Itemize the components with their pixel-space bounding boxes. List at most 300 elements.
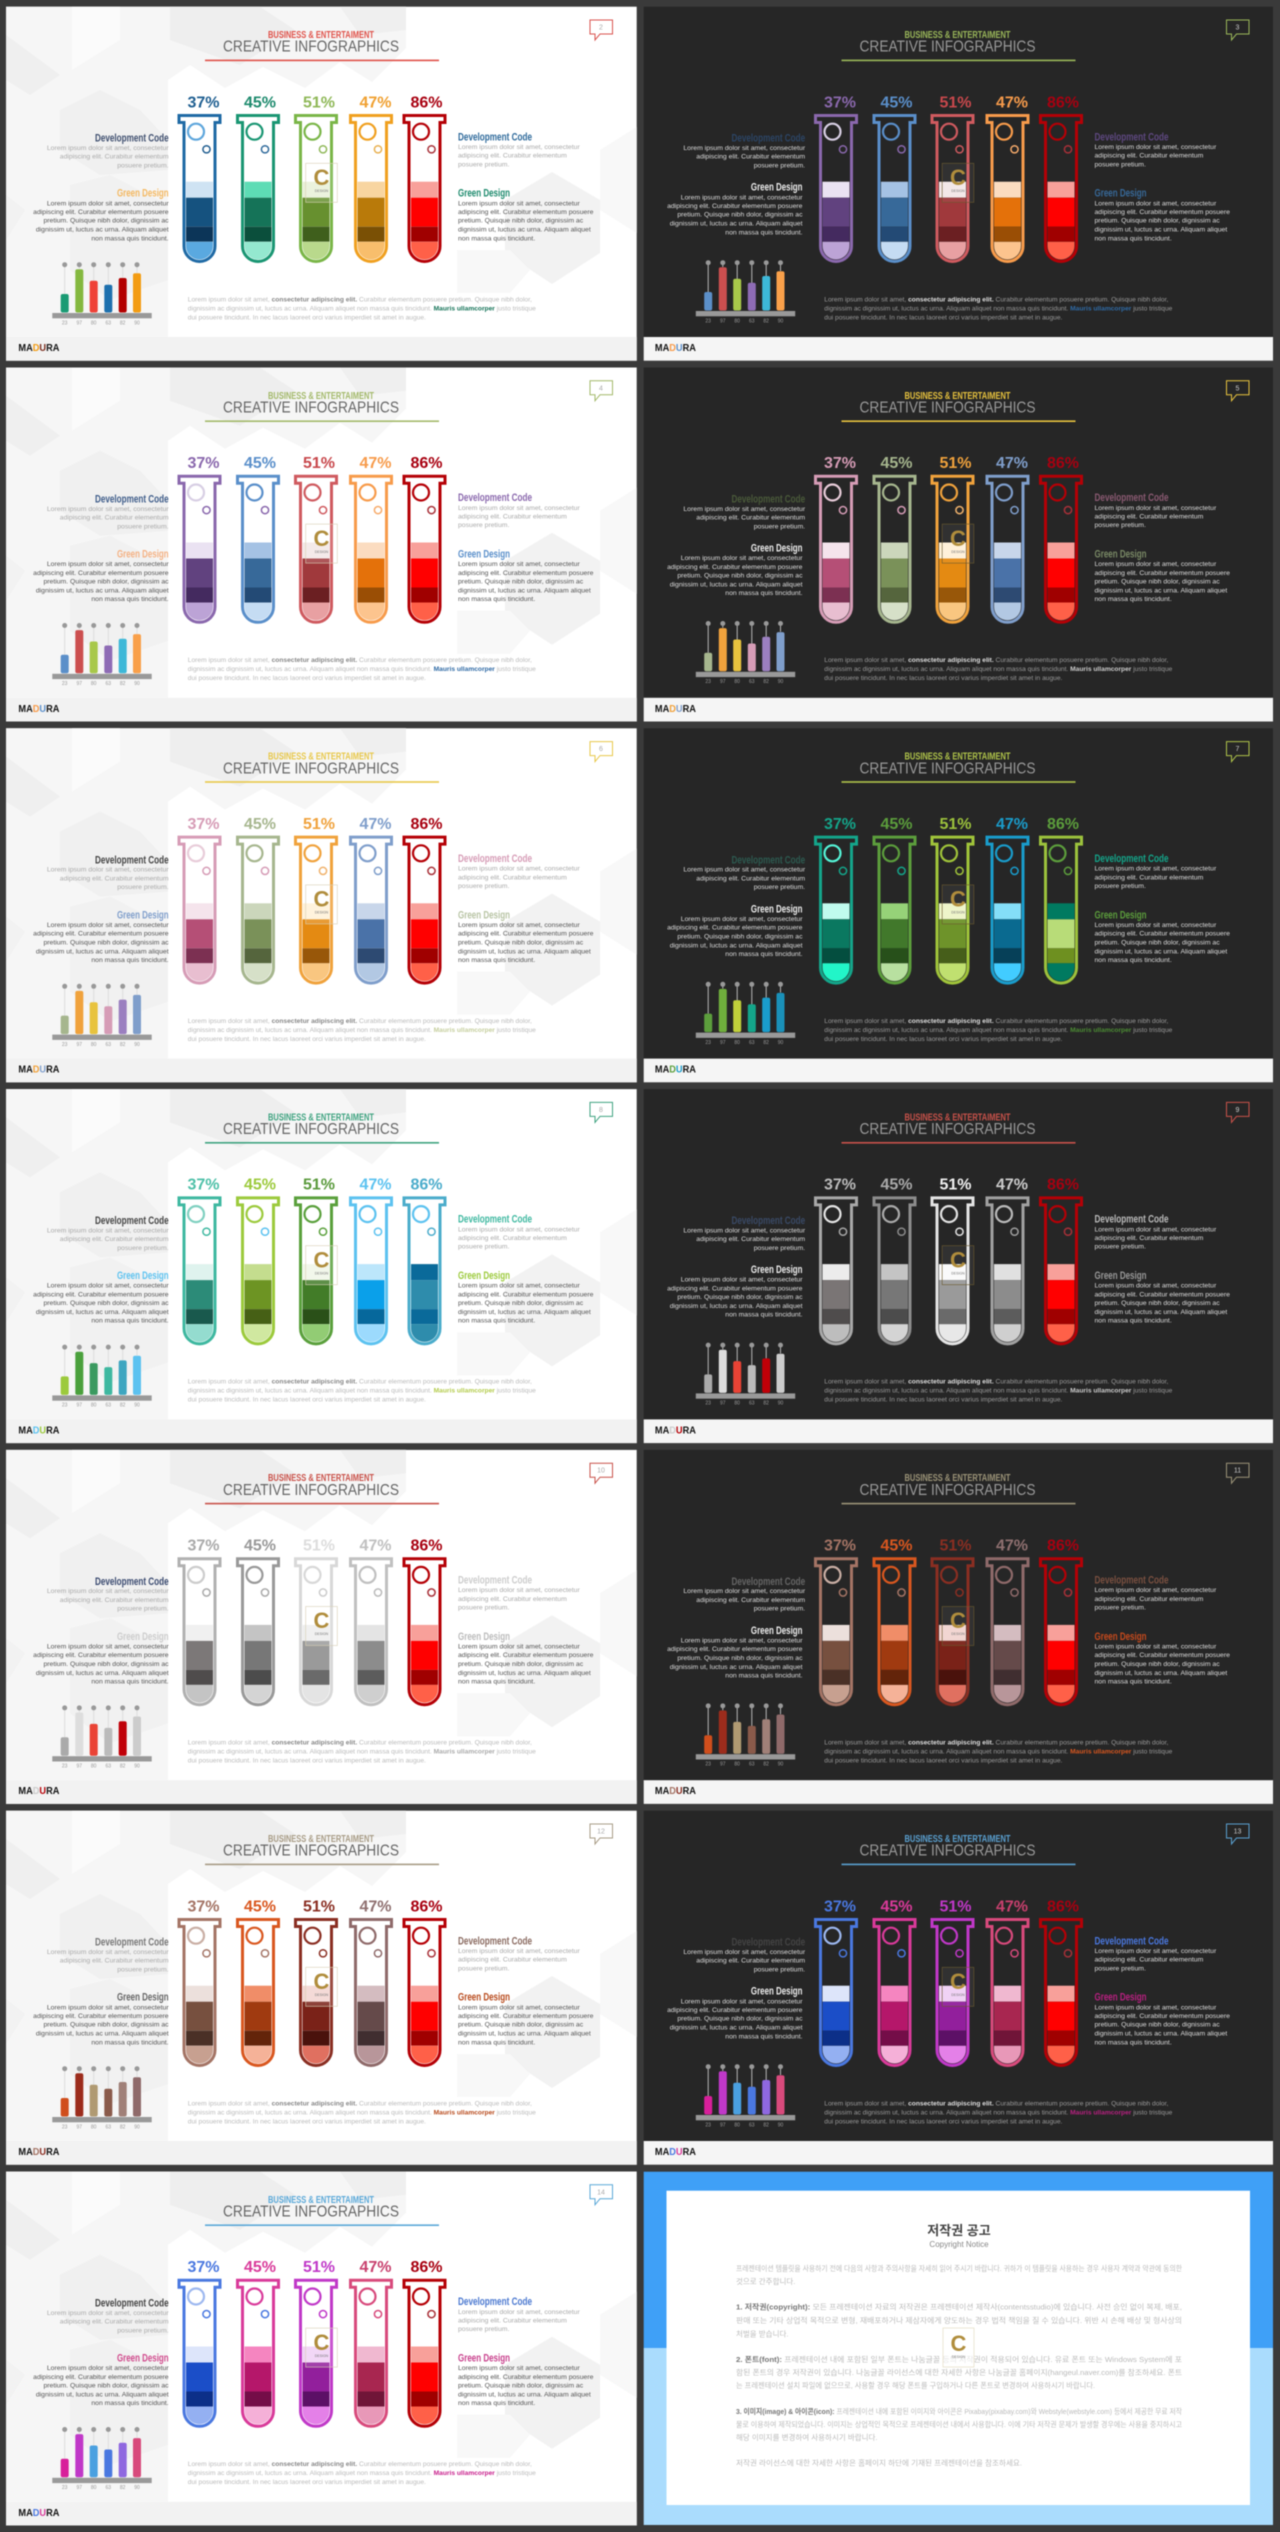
left development text: Lorem ipsum dolor sit amet, consectetur (47, 2310, 169, 2317)
bar chart: 63 (749, 1040, 755, 1046)
slide background (6, 1089, 637, 1443)
bottom paragraph: dui posuere tincidunt. In nec lacus laoreet orci varius imperdiet sit amet in augue. (188, 314, 426, 321)
bar chart: 23 (705, 318, 711, 324)
notice subtitle: Copyright Notice (929, 2240, 989, 2249)
bar chart: 97 (77, 1763, 82, 1769)
left green text: non massa quis tincidunt. (725, 2033, 803, 2040)
bottom paragraph: dui posuere tincidunt. In nec lacus laoreet orci varius imperdiet sit amet in augue. (188, 1397, 426, 1404)
heading: BUSINESS & ENTERTAIMENT (904, 1473, 1010, 1484)
heading (842, 30, 1076, 61)
right green text: pretium. Quisque nibh dolor, dignissim ac (1094, 578, 1220, 585)
slide 14 (6, 2172, 637, 2526)
right development text: Development Code (458, 1214, 532, 1226)
tube 37%: 37% (824, 455, 856, 472)
page number bubble (590, 1824, 612, 1844)
left green text: non massa quis tincidunt. (91, 2039, 169, 2046)
footer logo: MADURA (18, 2508, 59, 2519)
right green text: pretium. Quisque nibh dolor, dignissim ac (1094, 2022, 1220, 2029)
bar chart: 80 (734, 679, 740, 685)
left development text: adipiscing elit. Curabitur elementum (60, 514, 169, 521)
heading: CREATIVE INFOGRAPHICS (223, 2204, 399, 2221)
right green text: Green Design (458, 2353, 510, 2365)
tube 45% (874, 455, 915, 622)
left development text: adipiscing elit. Curabitur elementum (60, 2319, 169, 2326)
bar chart: 82 (120, 1403, 126, 1409)
bottom paragraph: consectetur adipiscing elit. Curabitur elementum posuere pretium. Quisque nibh dolor, (908, 1018, 1168, 1025)
watermark: DESIGN (952, 2355, 966, 2359)
page number bubble (1226, 742, 1249, 762)
right green text: non massa quis tincidunt. (1094, 235, 1172, 242)
left development text: adipiscing elit. Curabitur elementum (60, 154, 169, 161)
right green text: adipiscing elit. Curabitur elementum posuere (1094, 570, 1230, 577)
watermark: DESIGN (315, 189, 329, 193)
heading (842, 1834, 1076, 1865)
left green text: adipiscing elit. Curabitur elementum posuere (33, 1652, 169, 1659)
tube 45%: 45% (880, 1537, 913, 1554)
heading: CREATIVE INFOGRAPHICS (860, 1121, 1036, 1138)
right green text: adipiscing elit. Curabitur elementum posuere (458, 1652, 594, 1659)
bar chart (696, 621, 795, 685)
heading: CREATIVE INFOGRAPHICS (223, 39, 399, 56)
section image: 해당 이미지를 변경하여 사용하시기 바랍니다. (736, 2432, 878, 2442)
left green text: Lorem ipsum dolor sit amet, consectetur (47, 2365, 169, 2372)
tube 37% (816, 1898, 856, 2066)
left green text: non massa quis tincidunt. (725, 590, 803, 597)
bottom paragraph: Lorem ipsum dolor sit amet, (824, 657, 908, 664)
slide 13 (644, 1811, 1273, 2165)
left development text: Development Code (95, 493, 169, 505)
right development text: adipiscing elit. Curabitur elementum (1094, 874, 1204, 881)
bar chart: 82 (763, 1401, 769, 1407)
watermark: C (314, 1247, 330, 1272)
page number bubble: 5 (1236, 385, 1240, 392)
right development text: adipiscing elit. Curabitur elementum (458, 2318, 567, 2325)
tube 45%: 45% (244, 816, 276, 833)
bar chart (52, 1345, 152, 1409)
left green text: Green Design (751, 1264, 803, 1276)
page number bubble: 2 (599, 24, 603, 32)
bar chart: 80 (734, 1761, 740, 1767)
slide 7 (644, 728, 1273, 1082)
bar chart: 97 (77, 2124, 82, 2130)
bar chart: 97 (77, 681, 82, 687)
left green text: adipiscing elit. Curabitur elementum posuere (667, 564, 803, 571)
left green text: adipiscing elit. Curabitur elementum posuere (33, 570, 169, 577)
slide 10 (6, 1450, 637, 1804)
page number bubble: 9 (1236, 1107, 1240, 1114)
tube 45%: 45% (244, 1177, 276, 1194)
left development text: Development Code (732, 1215, 805, 1227)
bottom paragraph: Lorem ipsum dolor sit amet, (188, 1739, 272, 1746)
tube 37%: 37% (187, 816, 220, 833)
watermark: C (951, 2331, 967, 2356)
tube 51% (296, 2259, 336, 2426)
tube 51% (296, 816, 336, 983)
right development text: Development Code (458, 492, 532, 504)
bottom paragraph: dignissim ac dignissim ut, luctus ac urna. Aliquam aliquet non massa quis tincidunt. (824, 1027, 1070, 1034)
right green text: Green Design (1094, 909, 1147, 921)
bottom paragraph: dui posuere tincidunt. In nec lacus laoreet orci varius imperdiet sit amet in augue. (188, 2479, 426, 2486)
slide 2 (6, 7, 637, 361)
bar chart (696, 1703, 795, 1768)
bar chart: 82 (120, 1763, 126, 1769)
tube 51% (932, 455, 973, 622)
tube 86%: 86% (1047, 94, 1079, 111)
bar chart: 82 (120, 320, 126, 326)
page number bubble: 8 (599, 1107, 603, 1114)
left green text: adipiscing elit. Curabitur elementum posuere (667, 203, 803, 210)
bar chart (52, 1705, 152, 1770)
left development text: adipiscing elit. Curabitur elementum (60, 1236, 169, 1243)
page number bubble: 10 (597, 1468, 605, 1475)
right green text: Lorem ipsum dolor sit amet, consectetur (458, 1283, 580, 1290)
right green text: pretium. Quisque nibh dolor, dignissim ac (458, 1300, 584, 1307)
right development text: posuere pretium. (1094, 1604, 1146, 1611)
right green text: non massa quis tincidunt. (458, 596, 535, 603)
page number bubble (1226, 381, 1249, 401)
bar chart: 97 (720, 1761, 726, 1767)
tube 37%: 37% (824, 1898, 856, 1915)
bar chart: 90 (778, 1761, 783, 1767)
left green text: non massa quis tincidunt. (91, 235, 169, 242)
tube 47% (350, 1538, 392, 1705)
left development text: Lorem ipsum dolor sit amet, consectetur (683, 867, 806, 874)
bar chart: 90 (778, 2122, 783, 2128)
left green text: Green Design (117, 2353, 169, 2365)
left green text: Lorem ipsum dolor sit amet, consectetur (681, 1277, 803, 1284)
intro text: 프레젠테이션 템플릿을 사용하기 전에 다음의 사항과 주의사항을 자세히 읽어 주시기 바랍니다. 귀하가 이 템플릿을 사용하는 경우 사용자 계약과 약관에 동의한 (736, 2263, 1182, 2273)
watermark: C (314, 2330, 330, 2355)
tube 47%: 47% (359, 1177, 392, 1194)
left development text: Development Code (732, 493, 805, 505)
tube 47%: 47% (359, 816, 392, 833)
left green text: Lorem ipsum dolor sit amet, consectetur (47, 922, 169, 929)
left green text: dignissim ut, luctus ac urna. Aliquam aliquet (670, 1664, 803, 1671)
right green text: Green Design (1094, 1631, 1147, 1643)
bottom paragraph: Lorem ipsum dolor sit amet, (824, 1379, 908, 1386)
right green text: pretium. Quisque nibh dolor, dignissim ac (458, 1661, 584, 1668)
bottom paragraph: dui posuere tincidunt. In nec lacus laoreet orci varius imperdiet sit amet in augue. (188, 1757, 426, 1764)
slide background (644, 728, 1273, 1082)
tube 86% (404, 1177, 445, 1344)
tube 86%: 86% (410, 455, 443, 472)
tube 51%: 51% (303, 816, 335, 833)
bar chart: 63 (106, 320, 111, 326)
bar chart (52, 2427, 152, 2491)
bar chart (696, 1343, 795, 1407)
left development text: Lorem ipsum dolor sit amet, consectetur (47, 506, 169, 513)
right development text: adipiscing elit. Curabitur elementum (458, 1235, 567, 1242)
tube 86% (1040, 1898, 1082, 2066)
tube 47%: 47% (359, 1537, 392, 1554)
tube 86% (404, 816, 445, 983)
tube 86%: 86% (1047, 1537, 1079, 1554)
right green text: dignissim ut, luctus ac urna. Aliquam aliquet (458, 1309, 591, 1316)
right green text: Lorem ipsum dolor sit amet, consectetur (1094, 1283, 1217, 1290)
bar chart: 82 (763, 318, 769, 324)
right green text: adipiscing elit. Curabitur elementum posuere (458, 2013, 594, 2020)
section font: 는 프레젠테이션 설치 파일에 없으므로, 사용할 경우 해당 폰트를 구입하거나 다른 폰트로 변경하여 사용하시기 바랍니다. (736, 2380, 1095, 2390)
left green text: dignissim ut, luctus ac urna. Aliquam aliquet (36, 948, 169, 955)
bottom paragraph: dui posuere tincidunt. In nec lacus laoreet orci varius imperdiet sit amet in augue. (824, 314, 1063, 321)
page number bubble (590, 742, 612, 762)
tube 51% (932, 816, 973, 983)
right development text: Development Code (1094, 1574, 1168, 1586)
bar chart: 63 (749, 1761, 755, 1767)
tube 86%: 86% (410, 1898, 443, 1915)
tube 51%: 51% (939, 816, 972, 833)
left development text: Lorem ipsum dolor sit amet, consectetur (683, 1588, 806, 1595)
right development text: Lorem ipsum dolor sit amet, consectetur (458, 144, 580, 151)
right green text: Lorem ipsum dolor sit amet, consectetur (458, 561, 580, 568)
tube 47% (350, 1177, 392, 1344)
left green text: pretium. Quisque nibh dolor, dignissim ac (677, 212, 803, 219)
right green text: dignissim ut, luctus ac urna. Aliquam aliquet (1094, 587, 1227, 594)
tube 47% (350, 455, 392, 622)
slide background (6, 7, 637, 361)
right development text: Lorem ipsum dolor sit amet, consectetur (1094, 1587, 1217, 1594)
right development text: adipiscing elit. Curabitur elementum (1094, 1596, 1204, 1603)
right development text: posuere pretium. (458, 1244, 509, 1251)
tube 86%: 86% (410, 1177, 443, 1194)
right green text: dignissim ut, luctus ac urna. Aliquam aliquet (458, 2392, 591, 2399)
tube 37% (179, 1177, 220, 1344)
left green text: pretium. Quisque nibh dolor, dignissim ac (43, 939, 169, 946)
right green text: dignissim ut, luctus ac urna. Aliquam aliquet (1094, 227, 1227, 234)
tube 45% (874, 1177, 915, 1344)
left development text: adipiscing elit. Curabitur elementum (60, 875, 169, 882)
intro text: 것으로 간주합니다. (736, 2276, 795, 2286)
left green text: dignissim ut, luctus ac urna. Aliquam aliquet (36, 2031, 169, 2038)
tube 37%: 37% (187, 1537, 220, 1554)
heading: BUSINESS & ENTERTAIMENT (268, 2195, 374, 2206)
right development text: adipiscing elit. Curabitur elementum (458, 153, 567, 160)
left development text: posuere pretium. (117, 1606, 169, 1613)
tube 37% (179, 1538, 220, 1705)
left green text: adipiscing elit. Curabitur elementum posuere (667, 2007, 803, 2014)
tube 51% (932, 1538, 973, 1705)
right development text: Lorem ipsum dolor sit amet, consectetur (458, 866, 580, 873)
right development text: adipiscing elit. Curabitur elementum (458, 874, 567, 881)
right green text: pretium. Quisque nibh dolor, dignissim ac (458, 939, 584, 946)
left green text: pretium. Quisque nibh dolor, dignissim ac (43, 1661, 169, 1668)
left development text: posuere pretium. (117, 523, 169, 530)
left green text: pretium. Quisque nibh dolor, dignissim ac (677, 1655, 803, 1662)
slide 6 (6, 728, 637, 1082)
tube 47% (350, 1898, 392, 2066)
left green text: dignissim ut, luctus ac urna. Aliquam aliquet (36, 1670, 169, 1677)
right green text: Lorem ipsum dolor sit amet, consectetur (1094, 1643, 1217, 1650)
tube 51% (296, 94, 336, 262)
tube 45%: 45% (880, 1177, 913, 1194)
left development text: adipiscing elit. Curabitur elementum (696, 875, 805, 882)
left green text: pretium. Quisque nibh dolor, dignissim ac (677, 1294, 803, 1301)
heading: BUSINESS & ENTERTAIMENT (904, 1834, 1010, 1845)
tube 51% (296, 1538, 336, 1705)
bottom paragraph: consectetur adipiscing elit. Curabitur elementum posuere pretium. Quisque nibh dolor, (272, 657, 532, 664)
left development text: Lorem ipsum dolor sit amet, consectetur (47, 1227, 169, 1234)
notice title: 저작권 공고 (927, 2223, 991, 2238)
left development text: adipiscing elit. Curabitur elementum (696, 154, 805, 161)
watermark: DESIGN (315, 550, 329, 554)
bar chart (52, 984, 152, 1048)
slide background (644, 7, 1273, 361)
bar chart: 97 (77, 1042, 82, 1048)
left green text: pretium. Quisque nibh dolor, dignissim ac (677, 572, 803, 579)
footer logo: MADURA (655, 1425, 696, 1436)
footer logo: MADURA (655, 1065, 696, 1076)
right development text: Development Code (458, 1935, 532, 1947)
right green text: non massa quis tincidunt. (458, 2039, 535, 2046)
heading (205, 1834, 439, 1865)
left green text: pretium. Quisque nibh dolor, dignissim ac (43, 218, 169, 225)
left green text: non massa quis tincidunt. (725, 1312, 803, 1319)
bottom paragraph: dignissim ac dignissim ut, luctus ac urna. Aliquam aliquet non massa quis tincidunt. (824, 1388, 1070, 1395)
watermark: C (950, 887, 966, 912)
bar chart: 23 (62, 681, 68, 687)
left green text: Lorem ipsum dolor sit amet, consectetur (47, 1283, 169, 1290)
footer logo: MADURA (18, 2147, 59, 2158)
right development text: adipiscing elit. Curabitur elementum (1094, 153, 1204, 160)
tube 45% (874, 1898, 915, 2066)
tube 51%: 51% (303, 455, 335, 472)
right development text: posuere pretium. (1094, 883, 1146, 890)
left green text: Lorem ipsum dolor sit amet, consectetur (681, 1637, 803, 1644)
left green text: adipiscing elit. Curabitur elementum posuere (667, 1646, 803, 1653)
footer logo: MADURA (18, 1786, 59, 1797)
left development text: posuere pretium. (117, 1245, 169, 1252)
bar chart: 80 (734, 318, 740, 324)
bottom paragraph: Mauris ullamcorper justo tristique (434, 666, 536, 673)
left development text: posuere pretium. (117, 162, 169, 170)
page number bubble (1226, 1824, 1249, 1844)
right development text: Lorem ipsum dolor sit amet, consectetur (458, 1226, 580, 1233)
left development text: adipiscing elit. Curabitur elementum (696, 1236, 805, 1243)
right green text: adipiscing elit. Curabitur elementum posuere (1094, 1291, 1230, 1298)
page number bubble: 4 (599, 385, 603, 392)
right development text: Lorem ipsum dolor sit amet, consectetur (458, 1587, 580, 1594)
bottom paragraph: Lorem ipsum dolor sit amet, (188, 657, 272, 664)
tube 47% (350, 2259, 392, 2426)
closing text: 저작권 라이선스에 대한 자세한 사항은 홈페이지 하단에 기재된 프레젠테이션을 참조하세요. (736, 2458, 1022, 2468)
heading: BUSINESS & ENTERTAIMENT (904, 752, 1010, 763)
right green text: Lorem ipsum dolor sit amet, consectetur (1094, 2004, 1217, 2011)
left development text: posuere pretium. (754, 1966, 805, 1974)
slide 4 (6, 368, 637, 722)
tube 47% (987, 94, 1028, 262)
left green text: non massa quis tincidunt. (91, 2400, 169, 2407)
white card (666, 2191, 1250, 2505)
left development text: Development Code (95, 1576, 169, 1588)
tube 86% (404, 1898, 445, 2066)
bar chart: 82 (763, 2122, 769, 2128)
bottom paragraph: Mauris ullamcorper justo tristique (1070, 1388, 1172, 1395)
right green text: pretium. Quisque nibh dolor, dignissim ac (458, 218, 584, 225)
bar chart: 90 (134, 1403, 140, 1409)
page number bubble: 6 (599, 746, 603, 753)
left green text: dignissim ut, luctus ac urna. Aliquam aliquet (36, 2392, 169, 2399)
tube 45% (874, 816, 915, 983)
page number bubble (590, 2185, 612, 2205)
bar chart: 23 (62, 320, 68, 326)
left development text: Development Code (95, 133, 169, 145)
right green text: non massa quis tincidunt. (458, 957, 535, 964)
bar chart: 80 (734, 2122, 740, 2128)
right development text: posuere pretium. (458, 522, 509, 529)
bar chart: 90 (134, 1763, 140, 1769)
right development text: adipiscing elit. Curabitur elementum (458, 1596, 567, 1603)
slide background (6, 2172, 637, 2526)
watermark: DESIGN (951, 1993, 965, 1997)
heading: BUSINESS & ENTERTAIMENT (904, 30, 1010, 41)
right green text: Lorem ipsum dolor sit amet, consectetur (458, 200, 580, 207)
bar chart: 63 (749, 318, 755, 324)
page number bubble (590, 381, 612, 401)
watermark: DESIGN (315, 2354, 329, 2358)
watermark (306, 1967, 337, 2006)
heading: BUSINESS & ENTERTAIMENT (268, 391, 374, 402)
bottom paragraph: consectetur adipiscing elit. Curabitur elementum posuere pretium. Quisque nibh dolor, (908, 2100, 1168, 2107)
right green text: Green Design (1094, 188, 1147, 200)
left green text: dignissim ut, luctus ac urna. Aliquam aliquet (36, 227, 169, 234)
right development text: posuere pretium. (458, 1965, 509, 1972)
bottom paragraph: consectetur adipiscing elit. Curabitur elementum posuere pretium. Quisque nibh dolor, (272, 296, 532, 303)
bottom paragraph: Lorem ipsum dolor sit amet, (824, 296, 908, 303)
bottom paragraph: consectetur adipiscing elit. Curabitur elementum posuere pretium. Quisque nibh dolor, (908, 1379, 1168, 1386)
slide background (6, 368, 637, 722)
slide background (644, 1089, 1273, 1443)
left development text: posuere pretium. (754, 1245, 805, 1252)
tube 51%: 51% (939, 1898, 972, 1915)
bar chart (52, 262, 152, 326)
tube 45%: 45% (244, 1898, 276, 1915)
bar chart: 90 (134, 1042, 140, 1048)
left development text: posuere pretium. (117, 1966, 169, 1974)
left green text: Lorem ipsum dolor sit amet, consectetur (47, 561, 169, 568)
section copyright: 판매 또는 기타 상업적 목적으로 변형, 재배포하거나 제삼자에게 양도하는 경우 법적 책임을 질 수 있습니다. 위반 시 손해 배상 및 형사상의 (736, 2315, 1182, 2325)
left green text: non massa quis tincidunt. (91, 1318, 169, 1325)
tube 86%: 86% (410, 816, 443, 833)
tube 47% (350, 816, 392, 983)
tube 51% (932, 94, 973, 262)
left development text: posuere pretium. (117, 884, 169, 891)
left green text: dignissim ut, luctus ac urna. Aliquam aliquet (36, 1309, 169, 1316)
heading: BUSINESS & ENTERTAIMENT (904, 1112, 1010, 1123)
right green text: pretium. Quisque nibh dolor, dignissim ac (1094, 1661, 1220, 1668)
right green text: dignissim ut, luctus ac urna. Aliquam aliquet (1094, 948, 1227, 955)
bottom paragraph: Mauris ullamcorper justo tristique (1070, 666, 1172, 673)
slide background (6, 1450, 637, 1804)
tube 86% (404, 94, 445, 262)
right development text: Development Code (1094, 853, 1168, 865)
tube 45%: 45% (244, 1537, 276, 1554)
watermark: C (950, 1969, 966, 1994)
left development text: adipiscing elit. Curabitur elementum (696, 1958, 805, 1965)
left green text: Lorem ipsum dolor sit amet, consectetur (681, 194, 803, 201)
bar chart: 82 (120, 681, 126, 687)
bottom paragraph: consectetur adipiscing elit. Curabitur elementum posuere pretium. Quisque nibh dolor, (272, 2100, 532, 2107)
left green text: dignissim ut, luctus ac urna. Aliquam aliquet (36, 587, 169, 594)
right green text: adipiscing elit. Curabitur elementum posuere (458, 931, 594, 938)
tube 86% (404, 455, 445, 622)
right green text: non massa quis tincidunt. (458, 235, 535, 242)
right green text: adipiscing elit. Curabitur elementum posuere (1094, 209, 1230, 216)
bar chart: 63 (106, 2485, 111, 2491)
heading: CREATIVE INFOGRAPHICS (860, 1843, 1036, 1860)
left development text: Development Code (95, 1215, 169, 1227)
right development text: posuere pretium. (458, 883, 509, 890)
right green text: Lorem ipsum dolor sit amet, consectetur (458, 922, 580, 929)
